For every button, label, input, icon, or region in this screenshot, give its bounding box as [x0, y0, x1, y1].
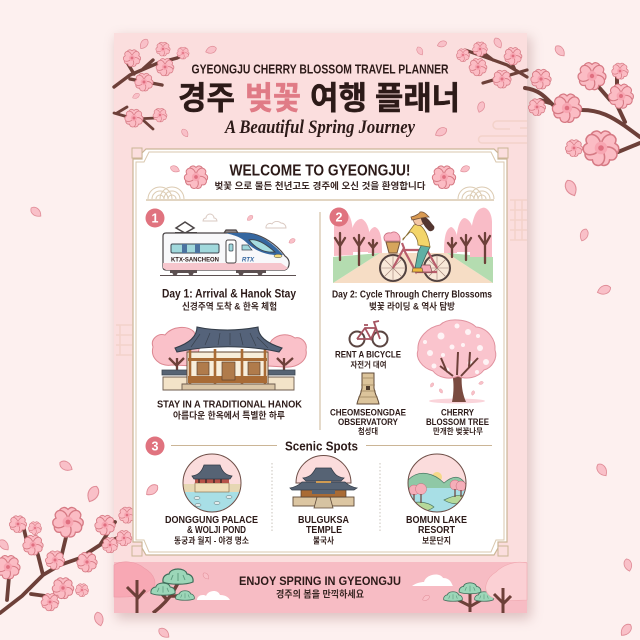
spot label: bulguksa: [298, 514, 349, 545]
day 1 korean: 신경주역 도착 & 한옥 체험: [182, 300, 277, 312]
hanok title: STAY IN A TRADITIONAL HANOK: [157, 398, 302, 410]
observatory label: 첨성대: [358, 426, 378, 436]
tree label: [426, 408, 489, 436]
scenic spots heading: Scenic Spots: [285, 440, 358, 454]
illustration: cycling scene: [333, 208, 493, 283]
korean title: 벚꽃: [245, 73, 301, 119]
day 1 title: Day 1: Arrival & Hanok Stay: [162, 288, 297, 300]
observatory label: OBSERVATORY: [338, 417, 399, 428]
illustration: KTX train: KTX-SANCHEON: [171, 256, 219, 264]
illustration: hanok house: [152, 327, 306, 390]
observatory label: [330, 408, 406, 436]
spot label: donggung: 동궁과 월지 - 야경 명소: [174, 535, 249, 545]
spot label: bulguksa: BULGUKSA: [298, 514, 349, 526]
spot label: bomun: 보문단지: [422, 535, 451, 545]
wave pattern ornaments: [148, 187, 494, 199]
welcome header: [148, 162, 494, 199]
lower left blossom branch: [0, 507, 136, 613]
spot: donggung palace: [183, 454, 241, 513]
faint traditional pattern: [116, 121, 528, 355]
footer clouds: [197, 572, 453, 602]
tree label: 만개한 벚꽃나무: [433, 426, 484, 436]
badge 3: [146, 436, 164, 456]
welcome petal left: [169, 164, 181, 174]
rent korean: 자전거 대여: [350, 360, 386, 370]
footer heading: ENJOY SPRING IN GYEONGJU: [239, 574, 401, 588]
illustration: KTX train: [160, 222, 296, 276]
korean title: 경주: [178, 73, 235, 119]
section 3: scenic spots: [144, 436, 492, 545]
footer korean: 경주의 봄을 만끽하세요: [276, 588, 364, 600]
petal on panel: [144, 482, 160, 498]
korean title: 여행: [310, 73, 367, 119]
icon: rental bicycle: [350, 321, 388, 346]
tree label: CHERRY: [441, 408, 475, 418]
illustration: KTX train: RTX: [242, 256, 255, 264]
poster shadow: [116, 37, 531, 619]
rent label: RENT A BICYCLE: [335, 350, 401, 360]
footer left cherry tree: [114, 562, 155, 613]
outer right blossom branch: [525, 63, 640, 168]
badge 3: 3: [152, 440, 159, 454]
badge 2: [330, 208, 348, 226]
welcome korean text: 벚꽃 으로 물든 천년고도 경주에 오신 것을 환영합니다: [214, 180, 426, 191]
spot: bomun lake: [408, 454, 466, 514]
clouds and petals around train: [203, 214, 296, 245]
cyclist with bicycle: [380, 212, 450, 281]
welcome heading: WELCOME TO GYEONGJU!: [230, 162, 410, 180]
poster sheet: [114, 33, 527, 613]
top right blossom branches: [415, 36, 527, 138]
spot label: bulguksa: 불국사: [313, 535, 334, 545]
korean title: 플래너: [375, 73, 460, 119]
main white panel with ornamental frame: [132, 148, 508, 556]
section 2: day 2: [330, 208, 496, 436]
top heading: GYEONGJU CHERRY BLOSSOM TRAVEL PLANNER: [192, 62, 449, 76]
footer pine right: [444, 583, 493, 612]
hanok korean: 아름다운 한옥에서 특별한 하루: [173, 410, 285, 420]
top left blossom branches: [114, 38, 217, 138]
section 1: day 1: [146, 208, 306, 420]
day 2 title: Day 2: Cycle Through Cherry Blossoms: [332, 288, 492, 300]
script subtitle: A Beautiful Spring Journey: [224, 117, 415, 138]
illustration: cherry blossom tree: [417, 320, 496, 404]
badge 1: 1: [152, 212, 159, 226]
spot label: donggung: [165, 514, 258, 545]
spot label: bulguksa: TEMPLE: [306, 524, 342, 536]
spot label: bomun: BOMUN LAKE: [406, 514, 467, 526]
spot label: donggung: & WOLJI POND: [187, 524, 246, 536]
spot: bulguksa temple: [290, 455, 357, 508]
badge 2: 2: [336, 210, 343, 224]
observatory label: CHEOMSEONGDAE: [330, 408, 406, 418]
footer band: [114, 562, 527, 613]
welcome flower right: [431, 166, 457, 190]
footer pine left: [151, 569, 194, 613]
spot label: donggung: DONGGUNG PALACE: [165, 514, 258, 526]
korean title: [178, 73, 460, 119]
welcome petal right: [459, 164, 471, 174]
spot label: bomun: [406, 514, 467, 545]
title block: [178, 62, 460, 138]
icon: cheomseongdae observatory: [357, 373, 379, 404]
tree label: BLOSSOM TREE: [426, 417, 489, 428]
day 2 korean: 벚꽃 라이딩 & 역사 탐방: [369, 300, 456, 312]
footer right cherry tree: [486, 562, 527, 613]
welcome flower left: [183, 166, 209, 190]
badge 1: [146, 208, 164, 228]
spot label: bomun: RESORT: [418, 524, 455, 536]
